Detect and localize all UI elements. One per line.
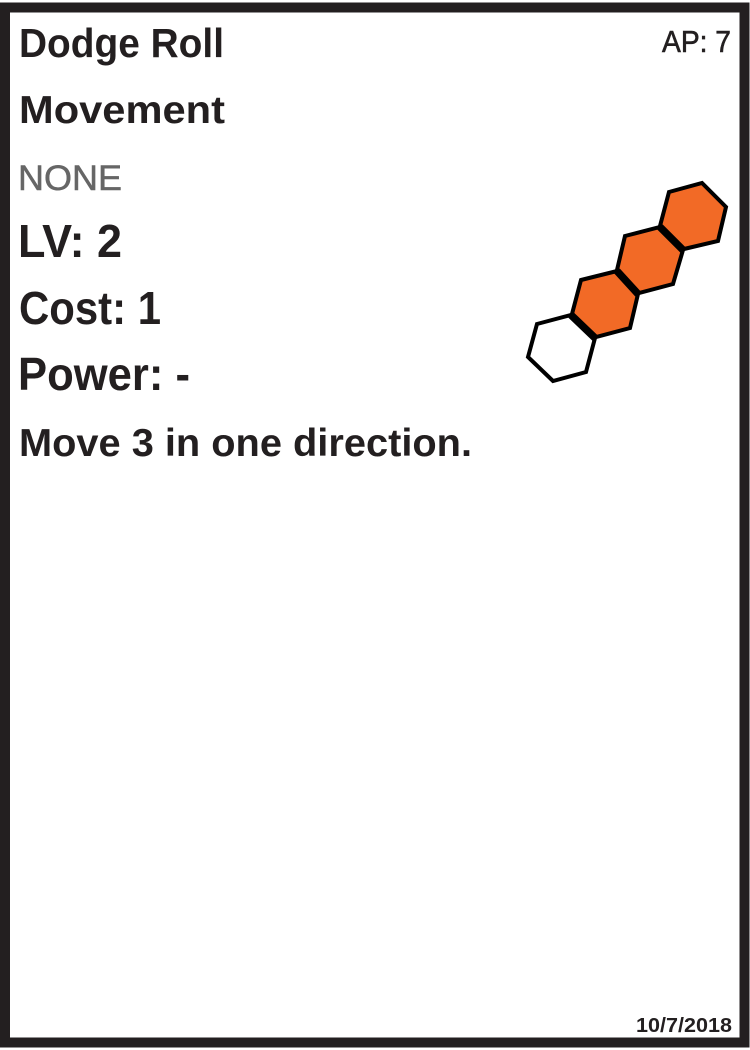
element: NONE: [18, 159, 122, 198]
hex: range 1: [572, 271, 638, 337]
shared hex edges: [571, 227, 683, 338]
hex: origin: [528, 315, 595, 381]
title: Dodge Roll: [19, 20, 224, 66]
hex range diagram: [528, 183, 726, 381]
power: Power: -: [18, 348, 190, 400]
level: LV: 2: [18, 215, 122, 267]
category: Movement: [19, 89, 225, 132]
description: Move 3 in one direction.: [19, 422, 472, 465]
date: 10/7/2018: [636, 1015, 732, 1037]
action points: AP: 7: [662, 24, 731, 59]
hex: range 3: [660, 183, 726, 249]
cost: Cost: 1: [19, 282, 161, 334]
hex: range 2: [617, 227, 683, 293]
